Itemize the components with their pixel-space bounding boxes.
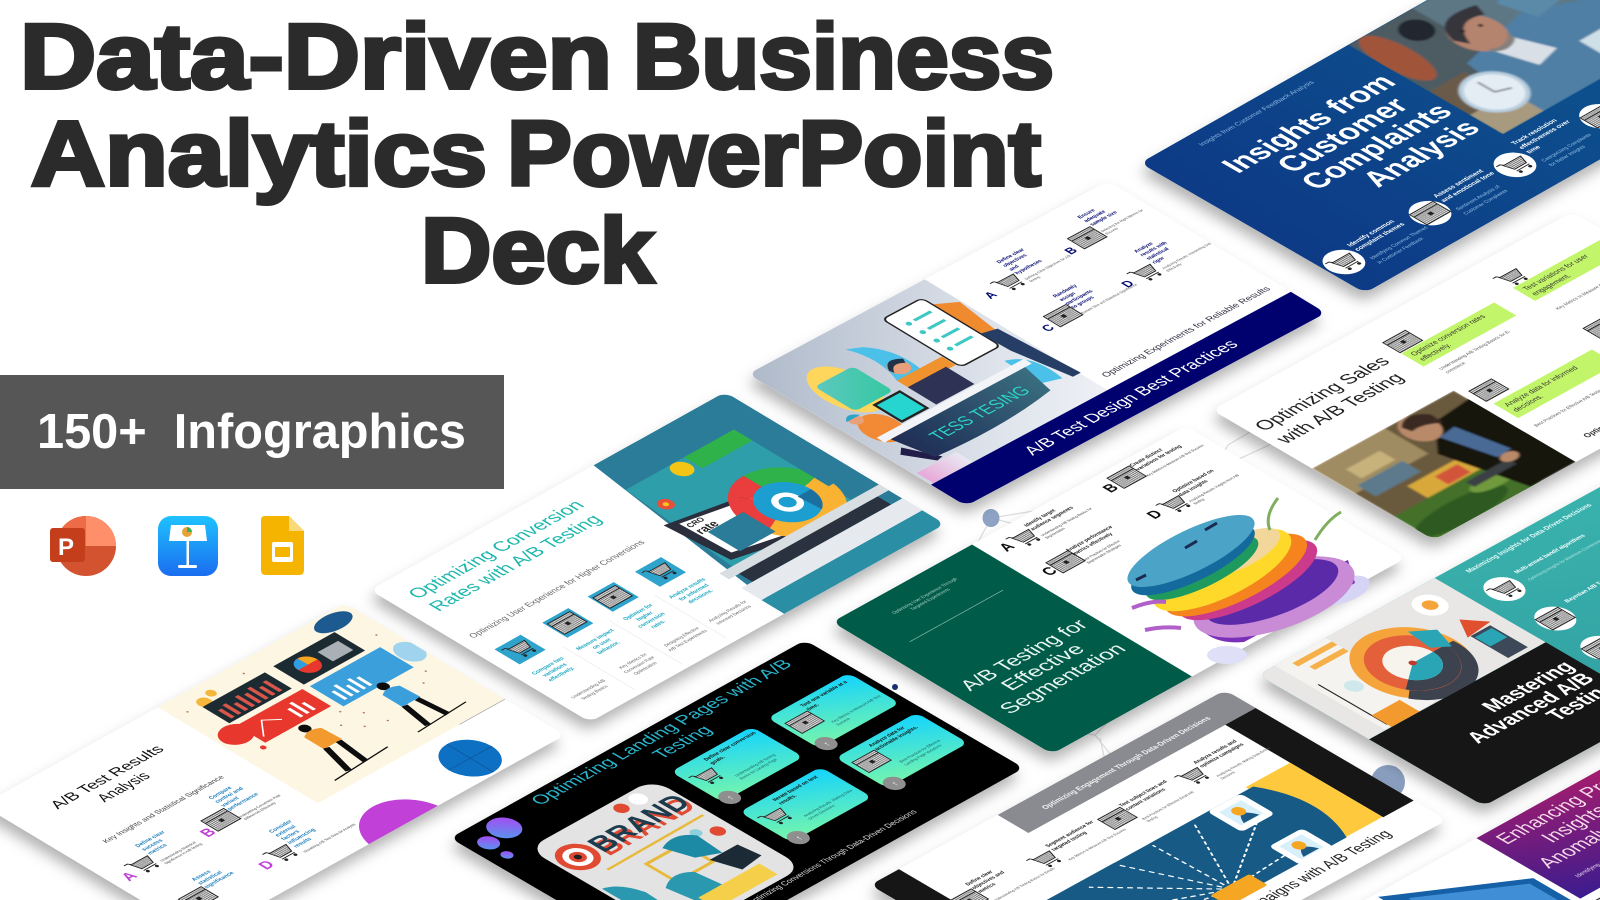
photo: shopper with tablet: [1312, 390, 1576, 538]
grey header band: [998, 690, 1256, 833]
icon row with labels: Sentiment Analysis of: [1455, 185, 1502, 212]
subtitle: Key Insights and Statistical Significance: [101, 774, 226, 844]
A/B/C/D checklist: factors: [280, 829, 302, 842]
A/B/C/D checklist: Segmentation: [1044, 527, 1066, 540]
slide title: Optimizing Conversion: [403, 497, 589, 602]
A/B/C/D checklist: hypotheses: [1014, 259, 1044, 276]
A/B/C/D checklist: rigor: [1151, 256, 1167, 265]
A/B/C/D checklist: Analyze performance: [1065, 525, 1115, 553]
A/B/C/D checklist: Key Metrics to Measure A/B Test Success: [1145, 444, 1205, 477]
four point labels: Segment audience for: [1044, 820, 1097, 849]
A/B/C/D checklist: Understanding A/B Testing Basics for: [1040, 507, 1094, 537]
slide title: Insights from: [1215, 70, 1404, 178]
slide: Optimizing Conversion Rates with A/B Testing: [370, 392, 945, 722]
slide: Enhancing Insights with Anomaly Detection: [1300, 739, 1600, 900]
slide: A/B Test Results Analysis: [0, 602, 612, 900]
A/B/C/D checklist: external: [274, 824, 298, 838]
A/B/C/D checklist: Success: [1104, 227, 1119, 235]
icon squares and labels: Measure impact: [575, 628, 616, 652]
four point labels: Define clear: [964, 869, 996, 887]
decorative dot: [892, 684, 898, 690]
main title: PowerPoint: [507, 103, 1041, 205]
A/B/C/D checklist: Compare: [208, 786, 235, 801]
gradient cards: ↑: [792, 834, 805, 841]
four point labels: optimize campaigns: [1198, 742, 1246, 769]
blue decorative circle: [438, 740, 502, 776]
A/B/C/D checklist: C: [1038, 322, 1058, 334]
slide title: with A/B Testing: [1270, 370, 1409, 447]
illustration: conversion rate dashboard: [564, 392, 945, 614]
gradient cards: time.: [805, 703, 822, 712]
title band: [931, 292, 1326, 506]
A/B/C/D checklist: influencing: [286, 828, 318, 845]
slide: Optimizing Landing Pages with A/B Testing: [450, 640, 1024, 900]
A/B/C/D checklist: adequate: [1083, 210, 1108, 223]
icon: PowerPoint: [50, 516, 116, 576]
brand illustration: BRAND: [580, 790, 699, 857]
black title panel: [1369, 642, 1600, 806]
A/B/C/D checklist: Randomly: [1052, 284, 1079, 299]
A/B/C/D checklist: metrics effectively: [1071, 532, 1115, 557]
A/B/C/D checklist: statistical: [1145, 247, 1172, 261]
icon squares and labels: Compare two: [531, 656, 567, 676]
slide title: A/B Test Results: [46, 743, 169, 812]
A/B/C/D checklist: A: [117, 869, 142, 884]
slide title: Effective: [996, 641, 1090, 694]
four point labels: [941, 731, 1278, 900]
icon squares and labels: Informed Decisions: [715, 604, 754, 626]
icon squares and labels: conversion: [637, 612, 668, 629]
slide title: Optimizing Landing Pages with A/B: [526, 656, 797, 808]
main title: Data-Driven: [20, 6, 612, 108]
brand illustration: [528, 779, 803, 900]
illustration: conversion rate dashboard: CRO: [684, 516, 707, 529]
illustration: dial and gauges: [1255, 576, 1549, 742]
gradient cards: ↑: [888, 780, 901, 787]
illustration: testing desk: [748, 279, 1109, 485]
icon row with labels: Track resolution: [1510, 118, 1559, 146]
icon squares and labels: Designing Effective: [663, 626, 701, 648]
slide title: Complaints: [1294, 99, 1460, 194]
slide title: A/B Test Design Best Practices: [1019, 337, 1243, 458]
A/B/C/D checklist: Defining Clear Objectives for A/B: [1024, 254, 1073, 281]
icon row with labels: Customer Complaints: [1462, 189, 1510, 216]
badge: 150+ Infographics: 150+ Infographics: [37, 405, 466, 459]
network lines behind slides: [925, 425, 1280, 770]
brand illustration: BRAND: [586, 793, 704, 860]
icon squares and labels: rates.: [650, 619, 668, 630]
icon squares and labels: variations: [541, 662, 569, 678]
gradient cards: ↑: [724, 794, 736, 801]
A/B/C/D checklist: participants: [1064, 289, 1095, 306]
badge: 150+ Infographics: [0, 375, 504, 489]
slide: Insights from Customer Complaints Analysis: [1140, 0, 1600, 293]
icon squares and labels: decisions.: [687, 588, 716, 605]
slide title: Rates with A/B Testing: [424, 512, 606, 614]
icon: Google Slides: [261, 516, 304, 575]
green panel subtitle: Targeted Experiments: [909, 587, 953, 612]
A/B/C/D checklist: [1000, 444, 1239, 575]
icon row with labels: effectiveness over: [1518, 119, 1573, 150]
gradient cards: actionable insights.: [873, 725, 921, 752]
A/B/C/D checklist: Define clear: [996, 247, 1027, 265]
A/B/C/D checklist: Sample Size and Statistical Significance: [1080, 283, 1138, 315]
subtitle: Optimizing Experiments for Reliable Results: [1099, 285, 1273, 379]
icon squares and labels: effectively.: [547, 666, 577, 683]
gradient cards: Analyze data for: [867, 726, 907, 748]
slide: A/B Testing for Effective Segmentation: [832, 426, 1406, 754]
four point labels: objectives and: [971, 870, 1007, 890]
A/B/C/D checklist: sample size: [1089, 210, 1119, 227]
icon squares and labels: Analyzing Results for: [707, 599, 749, 623]
icon squares and labels: behavior.: [596, 640, 622, 655]
gradient cards: Success: [834, 717, 851, 726]
green panel subtitle: Optimizing User Experience Through: [891, 577, 960, 615]
A/B/C/D checklist: Differences Effectively: [243, 801, 277, 821]
A/B/C/D checklist: Optimize based on: [1171, 469, 1216, 494]
gradient cards: Landing Page Variations: [903, 743, 943, 766]
black side strips: [870, 690, 1414, 900]
icon: Keynote: [158, 516, 218, 576]
A/B/C/D checklist: metrics: [147, 843, 169, 856]
A/B/C/D checklist: Define clear: [134, 830, 168, 849]
slide title: Segmentation: [994, 640, 1132, 717]
main title: Analytics: [31, 103, 487, 205]
slide title: Customer: [1269, 93, 1417, 177]
decorative circle behind engagement slide: [1371, 765, 1405, 799]
laptop illustration: [1378, 844, 1586, 900]
icon row with labels: Identifying Common Themes: [1369, 226, 1430, 261]
A/B/C/D checklist: Best Practices for Effective: [1081, 540, 1121, 562]
gradient cards: Understanding A/B Testing: [733, 753, 777, 777]
green title panel: [832, 545, 1192, 754]
slide title: Analysis: [1355, 116, 1488, 192]
icon squares and labels: Optimization: [632, 661, 659, 676]
slide title: Testing: [647, 722, 717, 762]
gradient cards: ↑: [820, 740, 833, 747]
A/B/C/D checklist: significance: [203, 871, 237, 890]
icon: PowerPoint: P: [58, 534, 74, 561]
gradient cards: Analyzing Results: Making Data-: [802, 788, 855, 818]
decorative bubbles: [477, 818, 522, 859]
teal panel content: Multi-armed bandit algorithms: [1513, 534, 1587, 575]
yellow and blue email network illustration: [991, 761, 1387, 900]
A/B/C/D checklist: control and: [214, 786, 246, 804]
four point labels: Best Practices for Effective Email A/B: [1141, 790, 1196, 821]
A/B/C/D checklist: Interpreting Conversion Rate: [239, 794, 282, 818]
A/B/C/D checklist: performance: [226, 792, 261, 812]
teal panel content: [1465, 504, 1600, 660]
A/B/C/D checklist: Ensure: [1077, 208, 1097, 220]
cards: key points: Understanding A/B Testing Basics for E-: [1438, 329, 1513, 371]
icon squares and labels: Optimize for: [622, 603, 656, 622]
icon row with labels: time: [1525, 145, 1543, 155]
gradient cards: results.: [778, 794, 799, 806]
A/B/C/D checklist: and: [1008, 264, 1021, 272]
purple decorative circle: [359, 799, 438, 844]
A/B/C/D checklist: variant: [220, 796, 241, 808]
A/B/C/D checklist: Significance in A/B Testing: [163, 842, 203, 865]
gradient cards: Key Metrics to Measure A/B Test: [830, 694, 883, 723]
icon squares and labels: on user: [591, 637, 614, 650]
A/B/C/D checklist: C: [1039, 565, 1062, 579]
A/B/C/D checklist: B: [1061, 245, 1081, 256]
A/B/C/D checklist: B: [1100, 482, 1123, 495]
A/B/C/D checklist: variations for testing: [1135, 444, 1184, 472]
A/B/C/D checklist: Effectively: [1165, 263, 1183, 272]
A/B/C/D checklist: Segmentation Strategies: [1086, 544, 1123, 564]
A/B/C/D checklist: to groups: [1070, 295, 1096, 310]
slide: Mastering Advanced A/B Testing: [1255, 475, 1600, 806]
four point labels: Analyze results and: [1192, 739, 1239, 765]
gradient cards: Test one variable at a: [799, 680, 850, 708]
A/B/C/D checklist: Testing: [1028, 276, 1041, 283]
illustration: rainbow funnel: [1119, 498, 1374, 664]
A/B/C/D checklist: A: [981, 289, 1001, 301]
icon row with labels: [1322, 104, 1600, 274]
cards: key points: [1382, 240, 1600, 438]
four point labels: content variations: [1124, 788, 1168, 812]
A/B/C/D checklist: Testing: [1192, 498, 1206, 505]
A/B/C/D checklist: Analyzing Results: Insights from A/B: [1188, 473, 1241, 503]
gradient cards: Basics for Landing Page: [738, 757, 779, 780]
four point labels: targeted testing: [1050, 831, 1089, 852]
A/B/C/D checklist: Consider: [268, 819, 295, 834]
four point labels: Decisions: [1220, 771, 1237, 780]
slide: Optimizing Email Campaigns with A/B Testing: [870, 690, 1447, 900]
A/B/C/D checklist: Understanding Statistical: [159, 841, 197, 862]
icon squares and labels: [494, 557, 751, 700]
gradient cards: Iterate based on test: [771, 775, 820, 802]
four point labels: Testing: [1145, 816, 1159, 823]
illustration: conversion rate dashboard: rate: [692, 518, 723, 536]
A/B/C/D checklist: Assess: [191, 870, 213, 882]
icon row with labels: Assess sentiment: [1432, 168, 1486, 199]
slide title: [1256, 358, 1406, 443]
four point labels: Key Metrics to Measure A/B Test Success: [1067, 828, 1127, 861]
four point labels: metrics: [977, 882, 998, 894]
cards: key points: decisions.: [1510, 393, 1546, 413]
icon row with labels: Identify common: [1346, 219, 1397, 248]
icon: [1596, 888, 1600, 900]
slide title: [526, 656, 816, 819]
A/B/C/D checklist: results with: [1139, 241, 1169, 258]
A/B/C/D checklist: statistical: [197, 870, 225, 886]
A/B/C/D checklist: Identify target: [1023, 508, 1058, 528]
icon squares and labels: higher: [635, 611, 656, 622]
teal panel content: Maximizing Insights for Data-Driven Decisions: [1465, 503, 1594, 574]
A/B/C/D checklist: Analyzing Results: Interpreting Data: [1161, 241, 1215, 270]
illustration: testing desk: TESS TESING: [924, 383, 1035, 443]
slide title: [1221, 77, 1478, 188]
icon row with labels: complaint themes: [1353, 222, 1407, 252]
A/B/C/D checklist: B: [196, 826, 221, 840]
icon squares and labels: Understanding A/B: [570, 678, 608, 700]
subtitle: Optimizing User Experience for Higher Conversions: [466, 538, 647, 640]
icon squares and labels: for informed: [678, 583, 711, 602]
decorative circle node: [982, 509, 1000, 527]
icon row with labels: and emotional tone: [1439, 171, 1497, 203]
A/B/C/D checklist: Visualizing A/B Test Data for Analysis: [302, 823, 357, 854]
slide title: Advanced A/B: [1462, 670, 1600, 747]
A/B/C/D checklist: Create distinct: [1129, 448, 1165, 468]
gradient cards: [671, 673, 977, 847]
A/B/C/D checklist: A: [996, 540, 1019, 554]
purple title panel: [1476, 739, 1600, 899]
A/B/C/D checklist: [123, 786, 356, 900]
A/B/C/D checklist: D: [1144, 508, 1167, 522]
icon row with labels: for Better Insights: [1548, 145, 1588, 167]
four point labels: Analyzing Results: Making Data-Driven: [1215, 747, 1272, 778]
icon squares and labels: Analyze results: [668, 577, 708, 600]
A/B/C/D checklist: success: [141, 838, 165, 852]
A/B/C/D checklist: D: [255, 858, 279, 872]
slide title: Mastering: [1477, 658, 1580, 716]
gradient cards: goals.: [709, 755, 727, 766]
illustration: cream panel with dashboards: [158, 602, 507, 803]
header text: Optimizing Engagement Through Data-Driven Decisions: [1039, 715, 1213, 811]
main title: Deck: [421, 200, 655, 302]
gradient cards: Define clear conversion: [703, 731, 758, 762]
cards: key points: Test variations for user: [1520, 253, 1591, 292]
cards: key points: engagement.: [1529, 272, 1573, 297]
A/B/C/D checklist: D: [1118, 278, 1138, 290]
four point labels: Test subject lines and: [1118, 780, 1169, 808]
icon squares and labels: A/B Test Experiments: [667, 629, 710, 653]
slide title: A/B Testing for: [955, 616, 1094, 694]
main title: [20, 6, 1054, 302]
cards: key points: Analyze data for informed: [1502, 364, 1580, 408]
icon squares and labels: Key Metrics for: [618, 652, 649, 670]
main title: Business: [633, 6, 1054, 108]
slide: Optimizing Sales with A/B Testing: [1206, 212, 1600, 545]
cards: key points: Optimize conversion rates: [1408, 313, 1488, 357]
gradient cards: Best Practices for Effective: [898, 738, 942, 763]
cards: key points: commerce: [1444, 361, 1468, 375]
gradient cards: Driven Decisions: [807, 804, 836, 820]
divider: [910, 590, 1003, 642]
A/B/C/D checklist: Selecting the Right Metrics for: [1100, 208, 1145, 233]
A/B/C/D checklist: audience segments: [1029, 506, 1076, 532]
cards: key points: effectively.: [1417, 342, 1454, 362]
slide: A/B Test Design Best Practices: [748, 180, 1328, 506]
A/B/C/D checklist: [986, 209, 1212, 331]
A/B/C/D checklist: assign: [1058, 291, 1078, 302]
icon squares and labels: Conversion Rate: [622, 655, 657, 675]
A/B/C/D checklist: Analyze: [1133, 242, 1155, 254]
icon row with labels: Categorizing Complaints: [1540, 133, 1594, 163]
A/B/C/D checklist: results: [293, 837, 314, 849]
slide title: Analysis: [93, 770, 155, 805]
icon squares and labels: Testing Basics: [580, 684, 610, 701]
slide title: [963, 620, 1126, 713]
photo: stressed man with clock: [1347, 0, 1600, 135]
slide title: Optimizing Sales: [1249, 353, 1394, 434]
subtitle: Insights from Customer Feedback Analysis: [1197, 80, 1317, 147]
icon row with labels: in Customer Feedback: [1376, 237, 1426, 265]
A/B/C/D checklist: data insights: [1177, 479, 1210, 497]
A/B/C/D checklist: objectives: [1002, 253, 1029, 268]
